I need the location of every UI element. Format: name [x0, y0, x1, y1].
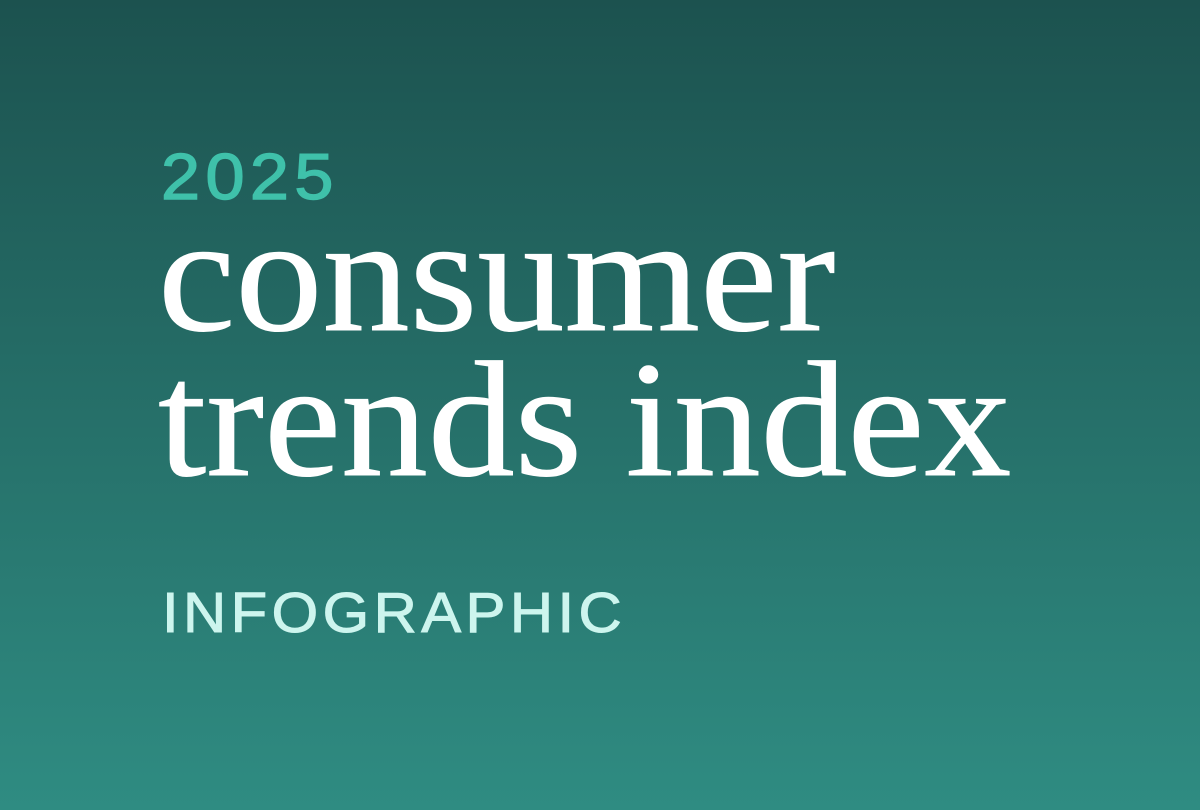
year label: 2025: [161, 140, 339, 213]
title: [158, 183, 1011, 511]
title: trends index: [158, 328, 1011, 511]
subtitle: INFOGRAPHIC: [162, 581, 626, 645]
title: consumer: [158, 183, 835, 366]
